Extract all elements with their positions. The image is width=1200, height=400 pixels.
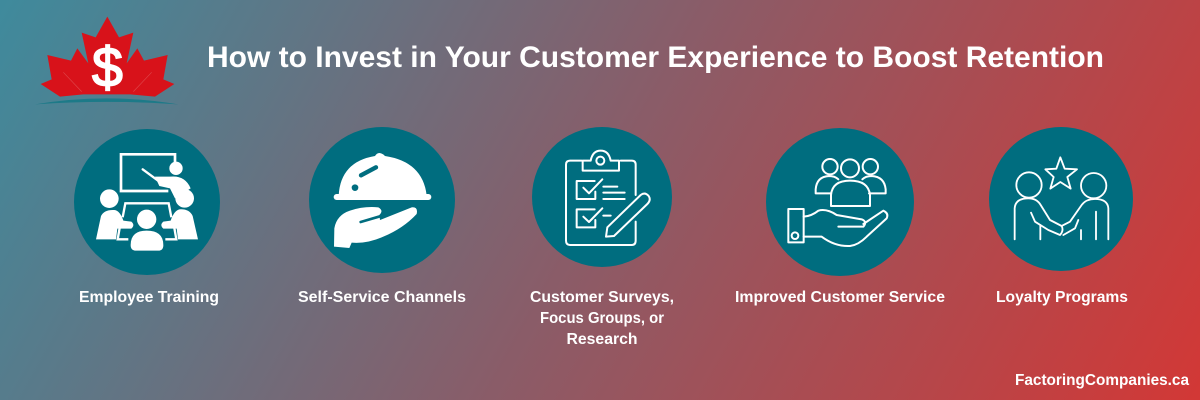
label: Focus Groups, or [540,310,664,327]
logo: maple leaf with dollar sign [35,17,178,104]
icon: clipboard checklist [532,127,672,267]
logo: maple leaf with dollar sign: $ [92,37,123,99]
item: employee training [74,129,220,306]
label [530,289,674,348]
icon: employee training [74,129,220,275]
item: loyalty programs [989,127,1133,306]
label: Loyalty Programs [996,289,1128,306]
label: Improved Customer Service [735,289,945,306]
label: Customer Surveys, [530,289,674,306]
website credit: FactoringCompanies.ca [1015,372,1189,389]
label: Self-Service Channels [298,289,466,306]
item: customer surveys [530,127,674,348]
item: self-service channels [298,127,466,306]
icon: handshake with star [989,127,1133,271]
title: How to Invest in Your Customer Experience to Boost Retention [207,41,1104,74]
item: improved customer service [735,128,945,306]
label: Employee Training [79,289,219,306]
icon: serving cloche and hand [309,127,455,273]
label: Research [566,331,638,348]
icon: hand holding people [766,128,914,276]
